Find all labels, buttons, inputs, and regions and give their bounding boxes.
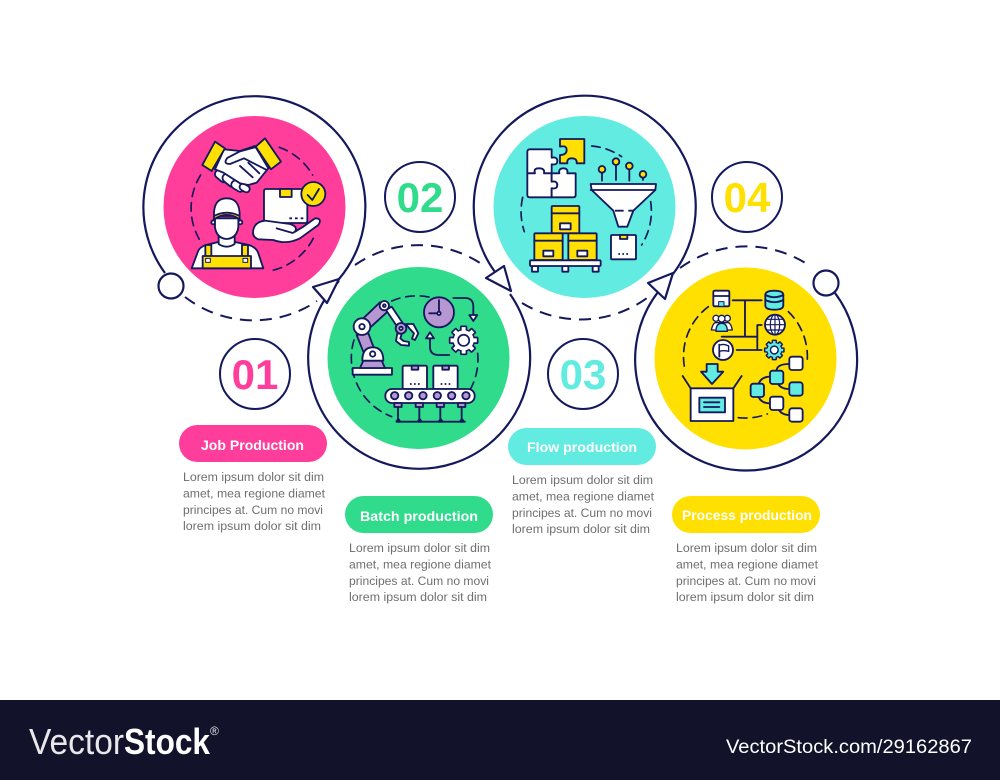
arrow: step 3 to 4	[648, 273, 673, 299]
number badge 02: 02	[397, 174, 443, 221]
footer logo: ®	[210, 724, 219, 738]
text block: step 4: Lorem ipsum dolor sit dim	[676, 541, 817, 555]
footer bar	[0, 700, 1000, 780]
panel: step 4 circle	[654, 268, 836, 450]
number badge 01	[220, 339, 290, 409]
label: Batch production: Batch production	[360, 508, 478, 524]
label: Flow production: Flow production	[527, 439, 637, 455]
text block: step 1: lorem ipsum dolor sit dim	[183, 519, 321, 533]
panel: step 2 circle	[328, 267, 510, 449]
text block: step 4	[676, 541, 819, 604]
text block: step 4: lorem ipsum dolor sit dim	[676, 590, 814, 604]
label: Batch production	[345, 496, 493, 533]
number badge 02	[385, 162, 455, 232]
panel: step 1 circle	[164, 116, 346, 298]
text block: step 2: lorem ipsum dolor sit dim	[349, 590, 487, 604]
text block: step 2: amet, mea regione diamet	[349, 558, 492, 572]
number badge 01: 01	[232, 351, 278, 398]
footer logo: Vector	[29, 721, 124, 762]
number badge 04	[712, 162, 782, 232]
flow connector: rings and dashes	[143, 96, 857, 470]
label: Flow production	[508, 428, 656, 465]
text block: step 3	[512, 473, 655, 536]
text block: step 1	[183, 470, 326, 533]
number badge 04: 04	[724, 174, 771, 221]
number badge 03	[548, 339, 618, 409]
label: Process production	[672, 496, 820, 533]
label: Job Production: Job Production	[201, 437, 304, 453]
text block: step 1: principes at. Cum no movi	[183, 503, 323, 517]
footer image id: VectorStock.com/29162867	[726, 736, 972, 758]
icon: job production	[191, 138, 325, 271]
arrow: step 1 to 2	[313, 279, 339, 303]
text block: step 3: principes at. Cum no movi	[512, 506, 652, 520]
text block: step 2: Lorem ipsum dolor sit dim	[349, 541, 490, 555]
text block: step 2	[349, 541, 492, 604]
text block: step 3: Lorem ipsum dolor sit dim	[512, 473, 653, 487]
label: Job Production	[179, 425, 327, 462]
icon: process production	[683, 291, 807, 422]
label: Process production: Process production	[682, 507, 812, 523]
icon: batch production	[351, 296, 478, 422]
text block: step 2: principes at. Cum no movi	[349, 574, 489, 588]
arrow: step 2 to 3	[486, 266, 511, 291]
start node circle	[158, 274, 184, 298]
text block: step 1: Lorem ipsum dolor sit dim	[183, 470, 324, 484]
footer logo: Stock	[124, 721, 211, 762]
text block: step 3: amet, mea regione diamet	[512, 490, 655, 504]
text block: step 4: principes at. Cum no movi	[676, 574, 816, 588]
end node circle	[814, 270, 838, 296]
icon: flow production	[521, 139, 656, 272]
footer logo	[29, 721, 219, 762]
panel: step 3 circle	[494, 116, 676, 298]
text block: step 4: amet, mea regione diamet	[676, 558, 819, 572]
text block: step 1: amet, mea regione diamet	[183, 486, 326, 500]
number badge 03: 03	[560, 351, 606, 398]
text block: step 3: lorem ipsum dolor sit dim	[512, 522, 650, 536]
